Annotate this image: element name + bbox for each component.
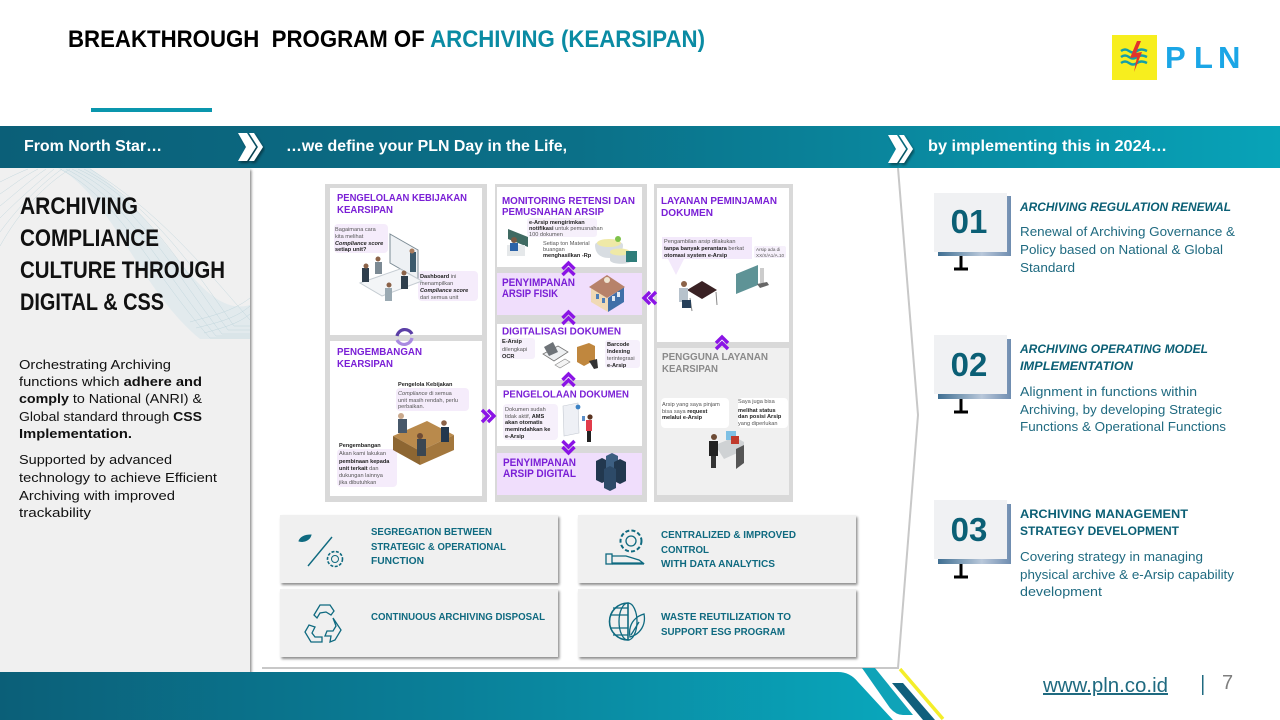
icon: chevron left: [238, 133, 263, 161]
panel: pengelolaan kebijakan: Dashboard ini: [420, 274, 456, 280]
illustration: user at desk: [709, 431, 744, 469]
illustration: control room: [507, 229, 637, 264]
panel: penyimpanan arsip digital: PENYIMPANAN: [503, 457, 576, 469]
panel: pengelolaan dokumen: memindahkan ke: [505, 427, 550, 433]
card: centralized: CENTRALIZED & IMPROVED: [661, 529, 796, 541]
panel: pengguna layanan: melihat status: [738, 408, 776, 414]
panel: monitoring retensi: menghasilkan -Rp: [543, 253, 592, 259]
panel: digitalisasi dokumen: DIGITALISASI DOKUMEN: [502, 326, 621, 338]
logo: PLN: L: [1194, 40, 1213, 75]
text block: description: Archiving with improved: [19, 488, 175, 503]
item: 03: 03: [951, 511, 987, 548]
card: continuous disposal: CONTINUOUS ARCHIVING DISPOSAL: [371, 611, 546, 623]
illustration: building: [589, 275, 625, 312]
panel: pengembangan kearsipan: [330, 341, 482, 496]
panel: layanan peminjaman: [657, 188, 789, 342]
panel: pengelolaan kebijakan: dari semua unit: [420, 295, 459, 301]
panel: digitalisasi dokumen: Indexing: [607, 349, 631, 355]
panel: digitalisasi dokumen: E-Arsip: [502, 339, 522, 345]
icon: recycle: [305, 605, 341, 642]
panel: penyimpanan arsip fisik: [497, 273, 642, 315]
panel: pengguna layanan: dan posisi Arsip: [738, 414, 782, 420]
panel: monitoring retensi: [497, 187, 642, 267]
panel: pengelolaan kebijakan: kita melihat: [335, 234, 364, 240]
text block: description: trackability: [19, 505, 92, 520]
item: 01: 01: [951, 203, 987, 240]
header band: by implementing this in 2024…: [928, 138, 1167, 155]
icon: cycle arrows: [397, 330, 412, 344]
card: waste reutilization: [578, 589, 856, 657]
panel: pengguna layanan: bisa saya request: [662, 409, 708, 415]
icon: leaf and gear: [299, 535, 342, 566]
panel: pengembangan kearsipan: Akan kami lakukan: [339, 451, 386, 457]
panel: penyimpanan arsip digital: [497, 453, 642, 495]
panel: pengelolaan dokumen: akan otomatis: [505, 420, 543, 426]
icon: gear and hand: [606, 530, 644, 564]
panel: pengembangan kearsipan: Pengelola Kebijakan: [398, 382, 453, 388]
panel: pengelolaan dokumen: e-Arsip: [505, 434, 525, 440]
panel: pengelolaan dokumen: PENGELOLAAN DOKUMEN: [503, 390, 629, 400]
item: 02: Alignment in functions within: [1020, 384, 1197, 399]
panel: layanan peminjaman: tanpa banyak perantara berkat: [664, 246, 744, 252]
illustration: servers: [596, 453, 626, 491]
panel: pengembangan kearsipan: unit terkait dan: [339, 466, 378, 472]
panel: pengguna layanan: yang diperlukan: [738, 421, 778, 427]
panel: monitoring retensi: notifikasi untuk pemusnahan: [529, 226, 603, 232]
logo: PLN: P: [1165, 40, 1186, 75]
item: 01: [934, 193, 1235, 275]
item: 03: development: [1020, 584, 1102, 599]
panel: pengelolaan kebijakan: [330, 188, 482, 335]
panel: pengelolaan kebijakan: Compliance score: [335, 241, 383, 247]
panel: pengelolaan dokumen: [497, 386, 642, 446]
heading: left: COMPLIANCE: [20, 225, 159, 252]
item: 01: ARCHIVING REGULATION RENEWAL: [1019, 200, 1231, 214]
panel: digitalisasi dokumen: e-Arsip: [607, 363, 627, 369]
panel: pengembangan kearsipan: PENGEMBANGAN: [337, 347, 422, 358]
panel: layanan peminjaman: DOKUMEN: [661, 208, 713, 219]
item: 02: IMPLEMENTATION: [1020, 359, 1133, 373]
item: 03: Covering strategy in managing: [1020, 549, 1203, 564]
page number: 7: [1222, 672, 1233, 694]
item: 01: Policy based on National & Global: [1020, 242, 1223, 257]
panel: pengembangan kearsipan: perbaikan.: [398, 404, 425, 410]
panel: pengembangan kearsipan: Pengembangan: [339, 443, 381, 449]
panel: pengelolaan kebijakan: setiap unit?: [335, 247, 367, 253]
panel: layanan peminjaman: XX/X/A1/A.10: [756, 253, 785, 258]
panel: digitalisasi dokumen: dilengkapi: [502, 347, 527, 353]
panel: penyimpanan arsip digital: ARSIP DIGITAL: [503, 468, 576, 480]
panel: layanan peminjaman: Pengambilan arsip dilakukan: [664, 239, 736, 245]
card: waste reutilization: SUPPORT ESG PROGRAM: [661, 626, 785, 638]
panel: pengembangan kearsipan: jika dibutuhkan: [338, 480, 376, 486]
card: segregation: SEGREGATION BETWEEN: [371, 526, 492, 538]
card: centralized: CONTROL: [661, 544, 710, 556]
panel: monitoring retensi: PEMUSNAHAN ARSIP: [502, 207, 604, 218]
panel: pengguna layanan: Arsip yang saya pinjam: [662, 402, 720, 408]
panel: pengelolaan dokumen: Dokumen sudah: [505, 407, 546, 413]
panel: digitalisasi dokumen: OCR: [502, 354, 514, 360]
text block: description: [19, 357, 217, 520]
text block: description: Orchestrating Archiving: [19, 357, 171, 372]
divider arrow outline: [262, 168, 918, 668]
item: 02: Functions & Operational Functions: [1020, 419, 1227, 434]
heading: left: ARCHIVING: [20, 193, 138, 220]
panel: digitalisasi dokumen: [497, 324, 642, 380]
heading: left: DIGITAL & CSS: [20, 289, 164, 316]
panel: pengguna layanan: KEARSIPAN: [662, 364, 718, 375]
footer link: www.pln.co.id: [1042, 675, 1168, 697]
panel: layanan peminjaman: Arsip ada di: [756, 247, 780, 252]
panel: pengembangan kearsipan: unit masih rendah, perlu: [398, 398, 458, 404]
panel: monitoring retensi: Setiap ton Material: [543, 241, 590, 247]
panel: pengelolaan dokumen: tidak aktif, AMS: [505, 414, 544, 420]
logo: PLN: N: [1218, 40, 1240, 75]
icon: arrows up: [482, 263, 728, 453]
illustration: office desk: [393, 413, 454, 465]
illustration: scanner and box: [543, 342, 598, 369]
text block: description: comply to National (ANRI) &: [19, 391, 202, 406]
card: continuous disposal: [280, 589, 558, 657]
panel: layanan peminjaman: LAYANAN PEMINJAMAN: [661, 196, 777, 207]
item: 03: [934, 500, 1235, 599]
icon: chevron right: [888, 135, 913, 163]
panel: pengembangan kearsipan: Compliance di semua: [398, 391, 453, 397]
panel: pengguna layanan: [657, 348, 789, 495]
panel: digitalisasi dokumen: Barcode: [607, 342, 629, 348]
card: segregation: [280, 515, 558, 583]
panel: pengembangan kearsipan: pembinaan kepada: [339, 459, 390, 465]
footer band: [0, 668, 943, 720]
text block: description: Supported by advanced: [19, 452, 172, 467]
text block: description: functions which adhere and: [19, 374, 202, 389]
text block: description: Implementation.: [19, 426, 132, 441]
item: 03: ARCHIVING MANAGEMENT: [1020, 507, 1189, 521]
title: BREAKTHROUGH PROGRAM OF ARCHIVING (KEARSIPAN): [68, 26, 705, 53]
heading: left: [20, 193, 225, 316]
header band: From North Star…: [24, 138, 162, 155]
panel: pengelolaan kebijakan: PENGELOLAAN KEBIJAKAN: [337, 193, 467, 204]
icon: globe and leaf: [610, 603, 644, 640]
item: 02: ARCHIVING OPERATING MODEL: [1019, 342, 1208, 356]
item: 01: Standard: [1020, 260, 1075, 275]
panel: program flow: [325, 184, 793, 502]
panel: pengelolaan kebijakan: Bagaimana cara: [335, 227, 377, 233]
panel: pengelolaan kebijakan: menampilkan: [420, 281, 453, 287]
panel: penyimpanan arsip fisik: PENYIMPANAN: [502, 277, 575, 289]
item: 02: Archiving, by developing Strategic: [1020, 402, 1223, 417]
panel: digitalisasi dokumen: terintegrasi: [607, 356, 635, 362]
logo: PLN: [1112, 35, 1240, 80]
card: centralized: WITH DATA ANALYTICS: [661, 558, 775, 570]
panel: pengembangan kearsipan: dukungan lainnya: [339, 473, 384, 479]
panel: left summary: [0, 168, 250, 672]
panel: penyimpanan arsip fisik: ARSIP FISIK: [502, 288, 558, 300]
panel: pengguna layanan: melalui e-Arsip: [662, 415, 703, 421]
card: segregation: FUNCTION: [371, 555, 424, 567]
panel: pengguna layanan: PENGGUNA LAYANAN: [662, 352, 768, 363]
illustration: worker and shelves: [679, 265, 769, 311]
item: 02: [934, 335, 1227, 434]
panel: monitoring retensi: buangan: [543, 247, 565, 253]
header band: [0, 126, 1280, 168]
item: 03: STRATEGY DEVELOPMENT: [1020, 524, 1180, 538]
heading: left: CULTURE THROUGH: [20, 257, 225, 284]
text block: description: Global standard through CSS: [19, 409, 202, 424]
panel: layanan peminjaman: otomasi system e-Arsip: [664, 253, 728, 259]
panel: monitoring retensi: MONITORING RETENSI DAN: [502, 196, 635, 207]
header band: …we define your PLN Day in the Life,: [286, 138, 567, 155]
card: centralized: [578, 515, 856, 583]
card: segregation: STRATEGIC & OPERATIONAL: [371, 541, 507, 553]
panel: pengembangan kearsipan: KEARSIPAN: [337, 359, 393, 370]
illustration: document and woman: [563, 403, 593, 442]
card: waste reutilization: WASTE REUTILIZATION TO: [661, 611, 791, 623]
panel: pengelolaan kebijakan: Compliance score: [420, 288, 468, 294]
footer separator: [1202, 675, 1204, 695]
item: 01: Renewal of Archiving Governance &: [1020, 224, 1235, 239]
item: 03: physical archive & e-Arsip capability: [1020, 567, 1235, 582]
panel: monitoring retensi: 100 dokumen: [529, 232, 563, 238]
illustration: meeting: [360, 234, 422, 301]
item: 02: 02: [951, 346, 987, 383]
text block: description: technology to achieve Efficient: [19, 470, 217, 485]
panel: pengelolaan kebijakan: KEARSIPAN: [337, 205, 393, 216]
panel: monitoring retensi: e-Arsip mengirimkan: [529, 220, 585, 226]
panel: pengguna layanan: Saya juga bisa: [738, 399, 776, 405]
